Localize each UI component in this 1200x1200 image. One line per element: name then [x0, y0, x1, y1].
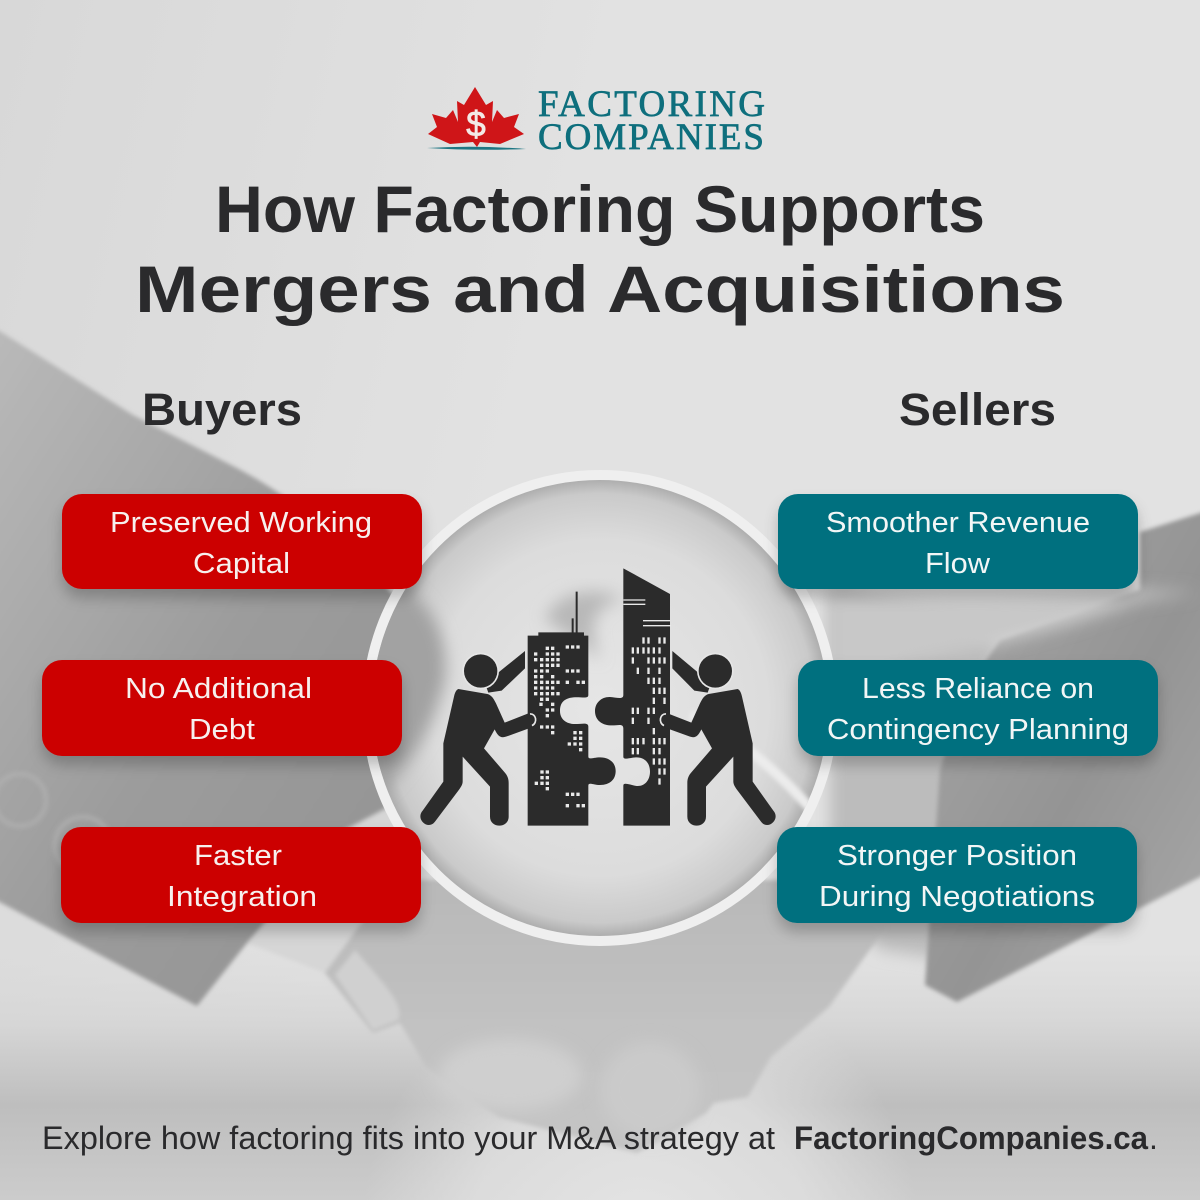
icon: right figure pushing: [658, 651, 776, 826]
icon: two figures joining puzzle-piece buildings: [420, 568, 776, 826]
panel: buyer benefit No Additional Debt: No Additional: [125, 673, 312, 705]
panel: seller benefit Less Reliance on Contingency Planning: Less Reliance on: [862, 673, 1094, 705]
panel: seller benefit Less Reliance on Contingency Planning: [798, 660, 1158, 756]
panel: seller benefit Stronger Position During Negotiations: Stronger Position: [837, 840, 1077, 872]
footer call to action: .: [1149, 1120, 1158, 1156]
panel: buyer benefit Preserved Working Capital: Preserved Working: [110, 507, 372, 539]
icon: left figure pushing: [420, 651, 538, 826]
logo wordmark: FACTORING: [538, 84, 765, 125]
panel: seller benefit Smoother Revenue Flow: [778, 494, 1138, 589]
icon: maple leaf with dollar sign: $: [466, 105, 486, 144]
panel: seller benefit Smoother Revenue Flow: Smoother Revenue: [826, 507, 1090, 539]
panel: buyer benefit Preserved Working Capital: Capital: [193, 548, 290, 580]
panel: seller benefit Stronger Position During Negotiations: During Negotiations: [819, 881, 1095, 913]
panel: buyer benefit Faster Integration: Faster: [194, 840, 282, 872]
footer call to action: [42, 1120, 1158, 1156]
footer call to action: FactoringCompanies.ca: [794, 1120, 1148, 1156]
footer call to action: Explore how factoring fits into your M&A strategy at: [42, 1120, 775, 1156]
icon: maple leaf with dollar sign: [427, 87, 526, 150]
panel: buyer benefit No Additional Debt: Debt: [189, 714, 255, 746]
heading: Buyers: Buyers: [142, 384, 302, 435]
panel: seller benefit Smoother Revenue Flow: Flow: [925, 548, 991, 580]
circle lens with ring: [360, 475, 835, 941]
icon: left building puzzle piece: [528, 592, 616, 826]
panel: buyer benefit Preserved Working Capital: [62, 494, 422, 589]
logo wordmark: [538, 84, 765, 158]
logo: [427, 84, 765, 158]
title: How Factoring Supports: [215, 172, 985, 246]
panel: seller benefit Less Reliance on Contingency Planning: Contingency Planning: [827, 714, 1129, 746]
title: Mergers and Acquisitions: [135, 252, 1065, 326]
heading: Sellers: Sellers: [899, 384, 1056, 435]
panel: seller benefit Stronger Position During Negotiations: [777, 827, 1137, 923]
panel: buyer benefit Faster Integration: Integration: [167, 881, 317, 913]
icon: right building puzzle piece: [595, 568, 671, 826]
panel: buyer benefit No Additional Debt: [42, 660, 402, 756]
logo wordmark: COMPANIES: [538, 117, 764, 158]
panel: buyer benefit Faster Integration: [61, 827, 421, 923]
title: [135, 172, 1065, 326]
